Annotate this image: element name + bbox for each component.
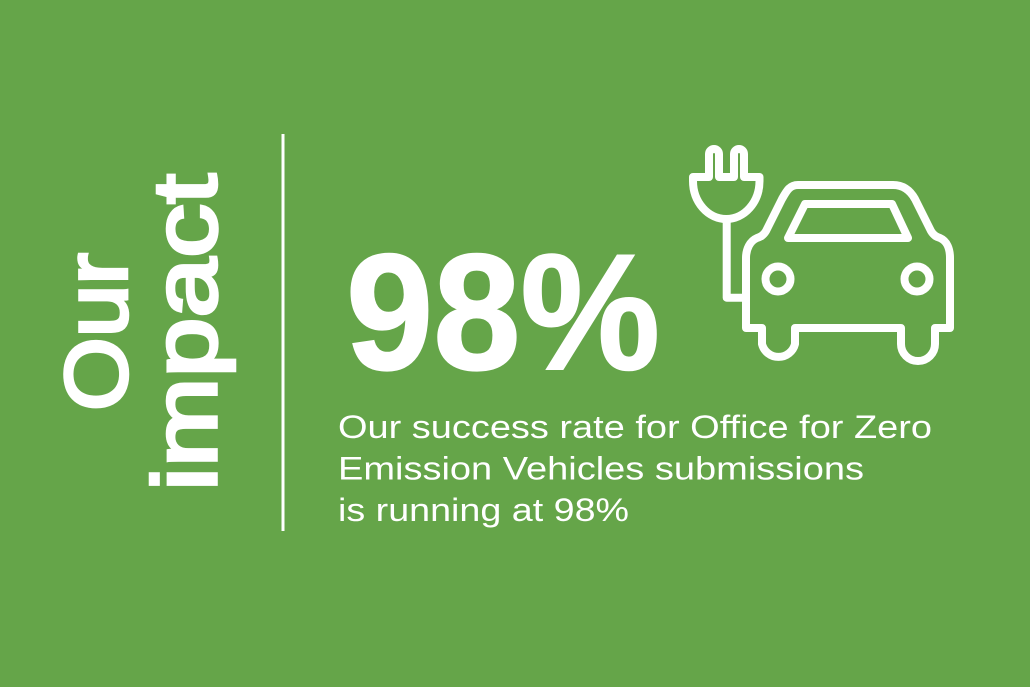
heading: Our impact (rotated): impact [136,174,236,491]
vertical divider [282,134,284,531]
description text: is running at 98% [338,492,629,528]
icon: electric car with plug [693,149,950,361]
description text: Our success rate for Office for Zero [338,409,932,445]
icon: plug [693,149,760,219]
heading: Our impact (rotated): Our [46,253,146,411]
icon: left headlight [766,266,790,292]
big number: 98%: 98% [346,220,660,404]
icon: cable [727,219,746,298]
icon: car body [746,185,950,361]
heading: Our impact (rotated) [46,174,236,491]
icon: right headlight [904,266,930,292]
description text [338,409,932,528]
description text: Emission Vehicles submissions [338,450,864,486]
icon: windshield [788,204,908,238]
